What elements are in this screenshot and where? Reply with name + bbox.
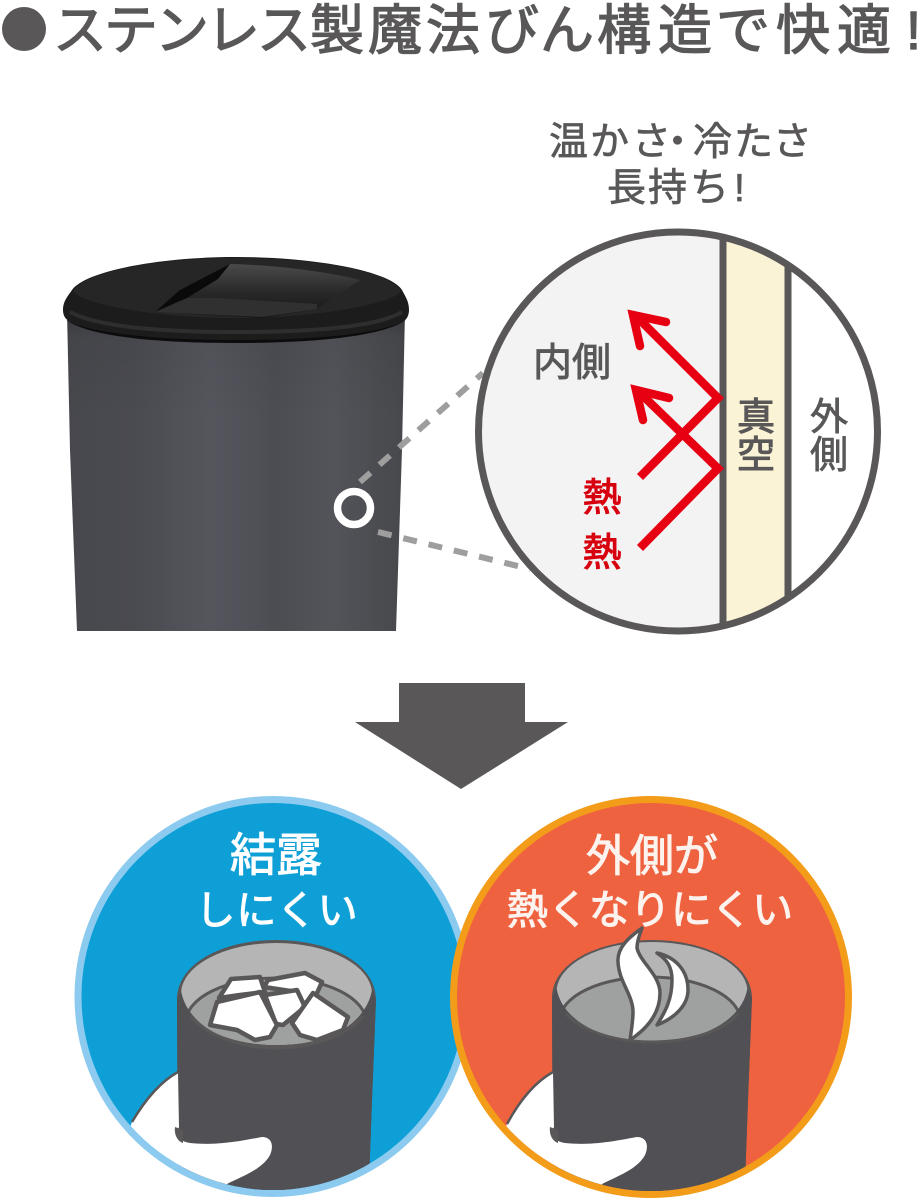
tumbler lid (63, 257, 409, 342)
hand (506, 1074, 647, 1185)
label: heat: 熱 (582, 477, 622, 520)
tumbler body (67, 310, 405, 631)
leader lines (360, 373, 530, 569)
hand (130, 1074, 272, 1184)
panel: vacuum cross-section (470, 225, 878, 640)
label: vacuum: 空 (737, 435, 775, 477)
label: outside (810, 397, 848, 477)
steam (618, 928, 688, 1040)
cup front (552, 988, 752, 1200)
cup with ice (130, 940, 376, 1190)
panel: outside stays cool (454, 800, 848, 1200)
cup front (177, 990, 376, 1200)
tumbler photo (63, 257, 409, 631)
label: inside: 内側 (533, 342, 611, 385)
cup with steam (506, 926, 752, 1191)
caption: keeps warm and cold: 温かさ・冷たさ (549, 121, 812, 164)
label: outside: 側 (810, 435, 848, 477)
label: outside: 外 (810, 397, 848, 439)
heading: condensation: しにくい (195, 889, 359, 933)
panel: resists condensation (78, 800, 468, 1200)
caption: keeps warm and cold: 長持ち! (607, 167, 745, 210)
heading: condensation: 結露 (230, 829, 322, 881)
label: heat: 熱 (582, 532, 622, 575)
label: vacuum: 真 (737, 397, 775, 439)
label: vacuum (737, 397, 775, 477)
arrow: down (355, 683, 568, 789)
arrows: reflected heat (633, 315, 718, 548)
heading: outside stays cool: 熱くなりにくい (507, 887, 793, 933)
ice cubes (210, 973, 348, 1040)
caption: keeps warm and cold (549, 121, 812, 210)
heading: outside stays cool: 外側が (586, 832, 718, 881)
zoom marker ring (338, 492, 370, 524)
heading: condensation (195, 829, 359, 933)
label: heat (582, 477, 622, 575)
title: ステンレス製魔法びん構造で快適! (53, 1, 921, 61)
heading: outside stays cool (507, 832, 793, 933)
